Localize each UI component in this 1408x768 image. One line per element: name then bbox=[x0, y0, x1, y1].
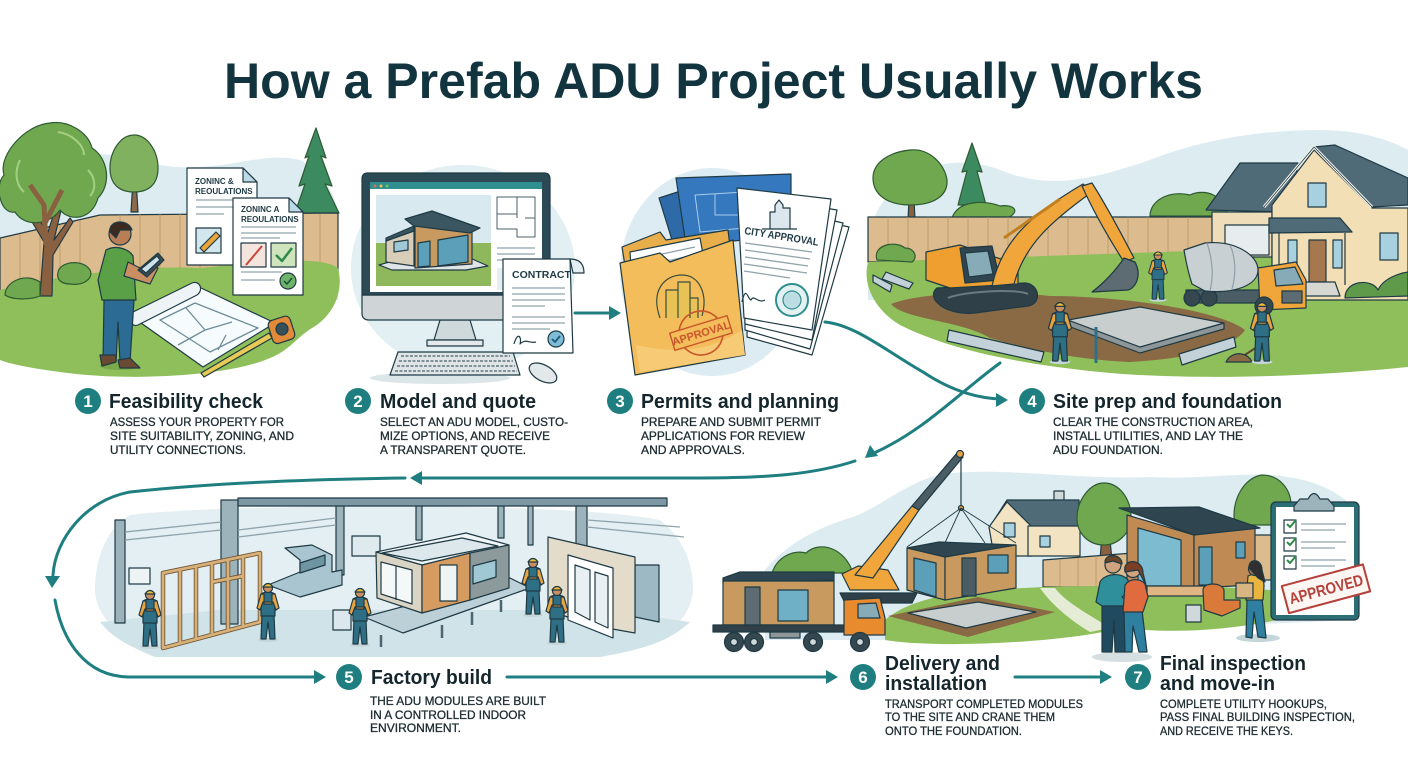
bushes behind fence bbox=[952, 192, 1228, 218]
icon: desktop monitor bbox=[362, 173, 550, 346]
panel: step 6 and 7 illustration backdrop bbox=[713, 450, 1370, 662]
standing panel with door frame bbox=[548, 537, 659, 638]
worker carrying bbox=[257, 584, 279, 642]
arrow: step 2 to step 3 bbox=[575, 306, 621, 320]
panel: step 2 illustration, computer and contract bbox=[351, 165, 584, 387]
step 5 text: 5 bbox=[344, 668, 354, 687]
excavator bbox=[926, 183, 1138, 313]
document: contract: CONTRACT bbox=[512, 269, 571, 281]
armchair bbox=[1203, 584, 1240, 616]
person carrying box bbox=[1236, 561, 1280, 642]
icon: mouse bbox=[526, 359, 560, 387]
step 3 text: PREPARE AND SUBMIT PERMIT bbox=[641, 415, 822, 429]
icon: pine tree bbox=[295, 128, 339, 213]
panel: step 5 illustration, factory bbox=[95, 498, 693, 657]
worker behind conveyor bbox=[522, 558, 544, 617]
title: How a Prefab ADU Project Usually Works bbox=[224, 53, 1203, 109]
document stack bbox=[741, 194, 849, 355]
document: zoning and regulations front: ZONINC A bbox=[241, 205, 280, 214]
step 6 text: Delivery and bbox=[885, 653, 1000, 675]
lawn bbox=[0, 261, 340, 377]
step 6 text: installation bbox=[885, 673, 987, 695]
excavation dirt bbox=[891, 293, 1245, 362]
step 6 text: ONTO THE FOUNDATION. bbox=[885, 724, 1022, 738]
conveyor bbox=[333, 578, 530, 647]
step 1 text: SITE SUITABILITY, ZONING, AND bbox=[110, 429, 294, 443]
folder building seal bbox=[657, 275, 704, 318]
step 7 text: COMPLETE UTILITY HOOKUPS, bbox=[1160, 697, 1327, 711]
step 7 text: PASS FINAL BUILDING INSPECTION, bbox=[1160, 710, 1355, 724]
wall frame bbox=[163, 553, 260, 648]
floor plan on screen bbox=[497, 197, 535, 237]
foundation slab with soil bbox=[888, 597, 1055, 637]
ADU module on line bbox=[376, 533, 509, 613]
bushes bbox=[772, 547, 853, 573]
document: city approval bbox=[737, 188, 831, 330]
step 6 text: 6 bbox=[858, 668, 868, 687]
document: zoning and regulations back bbox=[187, 168, 257, 265]
step 2 text: 2 bbox=[353, 392, 363, 411]
arrow: step 5 to step 6 bbox=[507, 670, 838, 684]
step 7 text bbox=[1125, 653, 1355, 738]
step 7 text: and move-in bbox=[1160, 673, 1275, 695]
finished ADU bbox=[1119, 507, 1260, 596]
icon: keyboard bbox=[390, 352, 520, 375]
blueprints bbox=[659, 174, 791, 245]
icon: small tree bbox=[110, 135, 158, 212]
pipes, stacked bbox=[873, 272, 913, 292]
approved stamp: APPROVED bbox=[1287, 572, 1365, 608]
foundation slab bbox=[1068, 307, 1224, 353]
step 1 text: ASSESS YOUR PROPERTY FOR bbox=[110, 415, 284, 429]
approval stamp bbox=[666, 303, 737, 363]
step 2 text bbox=[345, 388, 568, 457]
structural columns and beam bbox=[115, 498, 684, 624]
step 1 text: Feasibility check bbox=[109, 391, 264, 413]
moving box small bbox=[1186, 605, 1201, 622]
factory machine bbox=[268, 536, 380, 597]
icon: approved clipboard bbox=[1271, 494, 1359, 620]
fence bbox=[868, 217, 1214, 262]
delivery truck with module bbox=[713, 572, 885, 652]
panel: step 3 illustration, folder and city approval bbox=[620, 168, 849, 376]
step 3 text: APPLICATIONS FOR REVIEW bbox=[641, 429, 806, 443]
step 2 text: SELECT AN ADU MODEL, CUSTO- bbox=[380, 415, 568, 429]
arrow: sweep to lower row bbox=[410, 461, 855, 485]
icon: yellow folder bbox=[620, 230, 745, 375]
step 5 text: Factory build bbox=[371, 667, 492, 689]
step 5 text bbox=[336, 664, 547, 735]
document: zoning and regulations back: REOULATIONS bbox=[195, 187, 253, 196]
icon: tape measure bbox=[201, 315, 296, 377]
concrete mixer truck bbox=[1184, 243, 1306, 315]
tree behind clipboard bbox=[1234, 475, 1291, 525]
hanging ADU module bbox=[907, 542, 1016, 600]
icon: pine bbox=[958, 143, 986, 205]
document: contract bbox=[503, 259, 584, 353]
step 7 text: 7 bbox=[1133, 668, 1143, 687]
step 2 text: MIZE OPTIONS, AND RECEIVE bbox=[380, 429, 550, 443]
worker with plans bbox=[1149, 252, 1167, 302]
worker left bbox=[1048, 303, 1072, 364]
arrow: step 4 to factory, upper run bbox=[865, 363, 1000, 458]
step 7 text: AND RECEIVE THE KEYS. bbox=[1160, 724, 1293, 738]
house bbox=[1206, 145, 1408, 300]
lawn bbox=[885, 586, 1293, 644]
background house bbox=[989, 491, 1080, 556]
tree beside the ADU bbox=[1077, 483, 1131, 560]
document: zoning and regulations front: REOULATIONS bbox=[241, 215, 299, 224]
step 7 text: Final inspection bbox=[1160, 653, 1306, 675]
step 4 text: 4 bbox=[1027, 392, 1037, 411]
bush bbox=[876, 244, 915, 262]
step 3 text bbox=[607, 388, 839, 457]
worker at frame bbox=[139, 590, 161, 649]
step 6 text: TO THE SITE AND CRANE THEM bbox=[885, 710, 1055, 724]
panel: step 1 illustration, feasibility check in a backyard bbox=[0, 123, 340, 377]
backyard fence bbox=[0, 213, 338, 296]
document: zoning and regulations back: ZONINC & bbox=[195, 177, 234, 186]
step 5 text: THE ADU MODULES ARE BUILT bbox=[370, 694, 547, 708]
arrow: step 6 to step 7 bbox=[1015, 670, 1112, 684]
person with tablet bbox=[98, 222, 164, 370]
step 2 text: A TRANSPARENT QUOTE. bbox=[380, 443, 526, 457]
step 5 text: IN A CONTROLLED INDOOR bbox=[370, 708, 526, 722]
step 3 text: 3 bbox=[615, 392, 625, 411]
worker shoveling bbox=[1226, 303, 1274, 364]
step 2 text: Model and quote bbox=[380, 391, 536, 413]
icon: large tree bbox=[0, 123, 107, 299]
worker at panel bbox=[546, 586, 568, 645]
arrow: step 3 to step 4 bbox=[825, 322, 1008, 407]
step 1 text bbox=[75, 388, 294, 457]
mobile crane bbox=[840, 450, 1016, 603]
icon: round tree bbox=[873, 150, 947, 258]
arrow: left loop bottom to step 5 bbox=[55, 600, 326, 684]
couple with keys bbox=[1092, 556, 1152, 662]
survey post bbox=[1094, 327, 1098, 363]
step 4 text: CLEAR THE CONSTRUCTION AREA, bbox=[1053, 415, 1253, 429]
approval stamp: APPROVAL bbox=[671, 319, 732, 349]
document: city approval: CITY APPROVAL bbox=[744, 225, 820, 249]
pipe right bbox=[1179, 337, 1236, 365]
step 4 text: ADU FOUNDATION. bbox=[1053, 443, 1163, 457]
step 4 text bbox=[1019, 388, 1282, 457]
step 1 text: 1 bbox=[83, 392, 93, 411]
step 6 text: TRANSPORT COMPLETED MODULES bbox=[885, 697, 1083, 711]
step 3 text: Permits and planning bbox=[641, 391, 839, 413]
arrow: left loop to step 5 heading bbox=[45, 478, 405, 588]
step 1 text: UTILITY CONNECTIONS. bbox=[110, 443, 246, 457]
pipe left bbox=[947, 330, 1044, 362]
step 3 text: AND APPROVALS. bbox=[641, 443, 745, 457]
step 6 text bbox=[850, 653, 1083, 738]
electrical box bbox=[129, 568, 150, 584]
lawn bbox=[867, 250, 1408, 377]
document: zoning and regulations front bbox=[233, 198, 303, 295]
icon: blueprint roll bbox=[130, 282, 275, 367]
panel: step 4 illustration, site prep and foundation bbox=[867, 130, 1408, 377]
step 4 text: Site prep and foundation bbox=[1053, 391, 1282, 413]
ADU rendering on screen bbox=[376, 195, 491, 286]
step 5 text: ENVIRONMENT. bbox=[370, 721, 461, 735]
worker at conveyor bbox=[349, 588, 371, 647]
fence bbox=[1043, 535, 1272, 587]
step 4 text: INSTALL UTILITIES, AND LAY THE bbox=[1053, 429, 1243, 443]
